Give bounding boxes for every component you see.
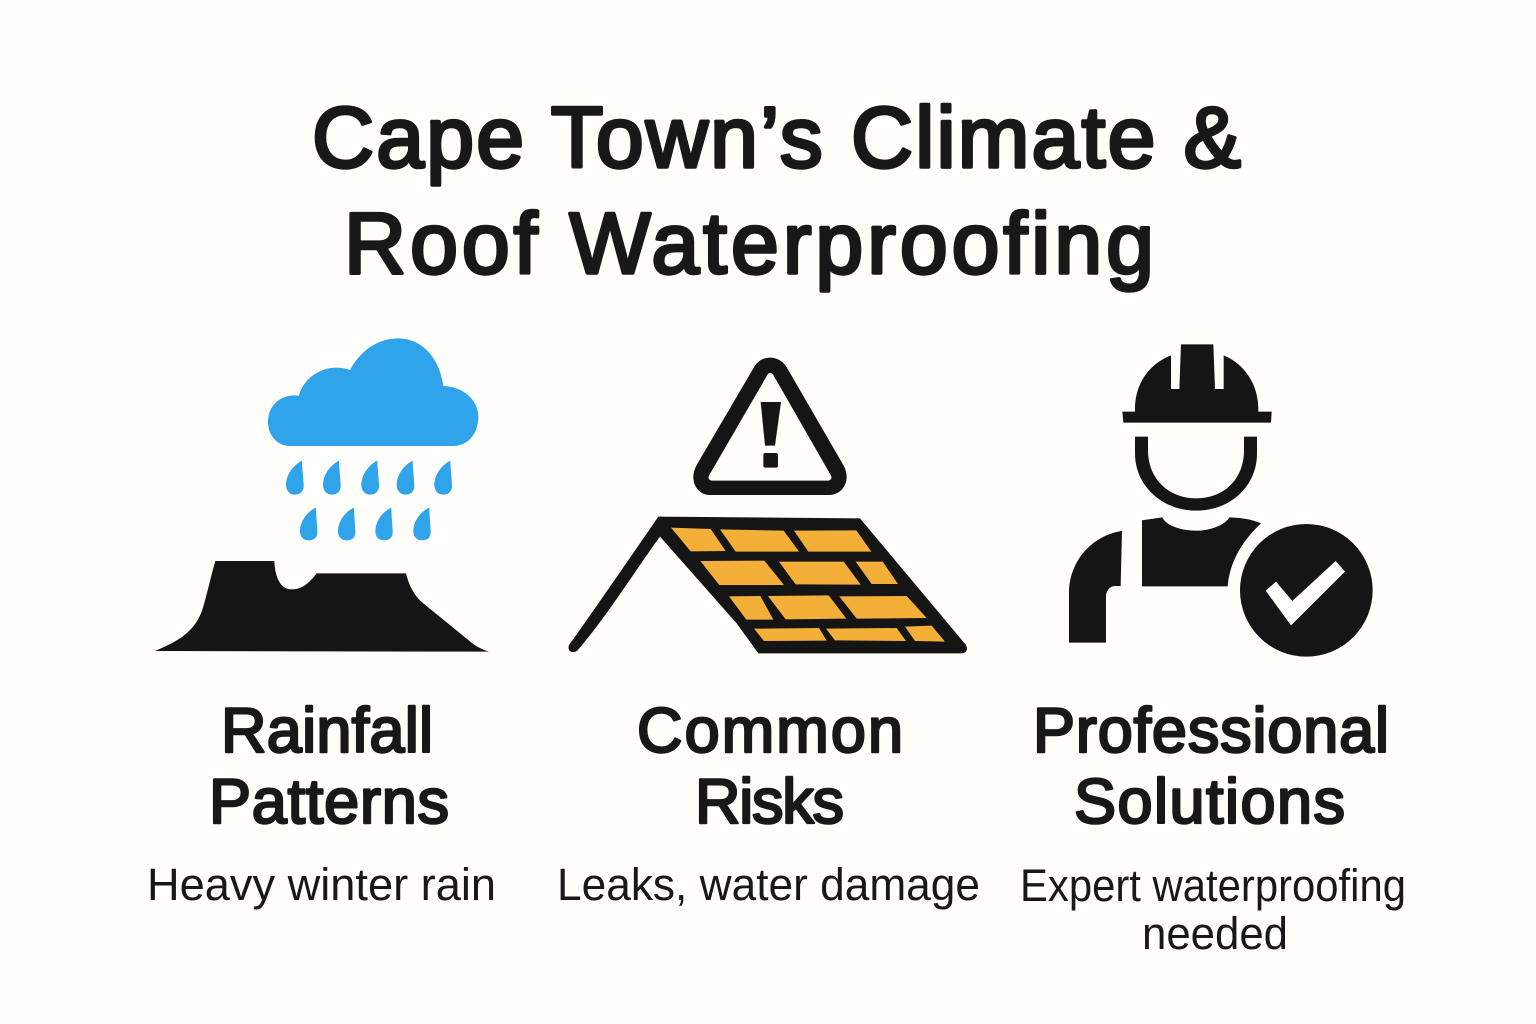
icon: rain drops <box>286 461 452 540</box>
title: Cape Town’s Climate & <box>312 90 1241 186</box>
icon: roof outline <box>569 517 967 653</box>
text: solutions description: needed <box>1142 908 1288 959</box>
text: solutions description <box>1020 860 1406 959</box>
icon: warning triangle <box>693 358 847 495</box>
icon: hard hat <box>1122 344 1272 423</box>
panel: professional solutions <box>1020 344 1406 959</box>
icon: rain cloud over Table Mountain <box>155 338 489 652</box>
icon: check badge <box>1240 524 1373 657</box>
heading: professional solutions: Solutions <box>1074 767 1345 837</box>
text: rainfall description: Heavy winter rain <box>147 859 496 910</box>
heading: professional solutions <box>1033 696 1389 837</box>
icon: torso <box>1142 517 1261 586</box>
heading: rainfall patterns: Patterns <box>209 767 449 837</box>
icon: Table Mountain <box>155 561 489 652</box>
icon: warning triangle over roof <box>569 358 967 653</box>
icon: arm <box>1069 531 1122 643</box>
title: Roof Waterproofing <box>344 196 1154 292</box>
heading: common risks: Risks <box>695 767 844 837</box>
icon: roof tiles <box>671 528 945 642</box>
text: risks description: Leaks, water damage <box>557 859 980 910</box>
heading: common risks <box>637 696 903 837</box>
heading: common risks: Common <box>637 696 903 766</box>
panel: rainfall patterns <box>147 338 496 910</box>
title <box>312 90 1241 292</box>
heading: rainfall patterns <box>209 696 449 837</box>
heading: rainfall patterns: Rainfall <box>221 696 433 766</box>
panel: common risks <box>557 358 980 910</box>
icon: cloud <box>268 338 478 446</box>
icon: face outline <box>1135 437 1257 511</box>
icon: worker with check badge <box>1069 344 1373 657</box>
heading: professional solutions: Professional <box>1033 696 1389 766</box>
text: solutions description: Expert waterproofing <box>1020 860 1406 911</box>
